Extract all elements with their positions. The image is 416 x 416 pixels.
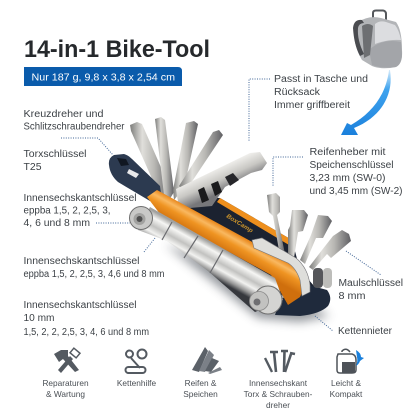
caption: Leicht & Kompakt: Kompakt (330, 389, 363, 399)
tool: tube joints (162, 222, 223, 273)
tool: tire lever (176, 152, 267, 208)
caption: Reifen & Speichen (183, 378, 218, 399)
icon: hammer and roller (54, 348, 80, 373)
caption: Reifen & Speichen: Speichen (183, 389, 218, 399)
caption: Kettenhilfe: Kettenhilfe (117, 378, 156, 388)
tool: logo: BoxCamp (225, 214, 254, 235)
caption: Innensechskant: dreher (266, 400, 290, 410)
label: Maulschlüssel: 8 mm (338, 291, 366, 302)
icon: tire levers fan (192, 347, 222, 374)
tool: orange main arm (147, 190, 306, 305)
caption: Innensechskant: Innensechskant (249, 378, 308, 388)
label: Innensechskant 1 (24, 193, 136, 229)
title: 14-in-1 Bike-Tool (24, 36, 210, 63)
tool: fanned hex bits upper (130, 117, 223, 202)
label: Torx: T25 (24, 162, 42, 173)
label: Innensechskant 2: Innensechskantschlüssel (24, 256, 140, 267)
label: Innensechskant 1: eppba 1,5, 2, 2,5, 3, (24, 206, 110, 216)
badge: weight and dimensions (24, 67, 182, 86)
label: Passt in Tasche: Rücksack (274, 87, 321, 98)
caption: Leicht & Kompakt (330, 378, 363, 399)
label: Torx: Torxschlüssel (24, 149, 86, 160)
label: Innensechskant 2: eppba 1,5, 2, 2,5, 3, 4,6 und 8 mm (24, 269, 164, 280)
tool shadow (165, 244, 330, 322)
label: Reifenheber: Reifenheber mit (310, 147, 386, 158)
caption: Innensechskant: Torx & Schrauben- (244, 389, 313, 399)
leader lines (61, 79, 381, 331)
tool: right hex bits (267, 193, 351, 270)
label: Kettennieter: Kettennieter (338, 326, 393, 337)
tool: orange rear strip (217, 198, 292, 245)
label: Maulschlüssel (338, 278, 403, 302)
icon: backpack (353, 10, 402, 68)
tool: silver tube (138, 207, 283, 312)
arrow: backpack to tool (341, 70, 391, 135)
label: Kreuzdreher: Schlitzschraubendreher (24, 122, 125, 132)
label: Innensechskant 1: 4, 6 und 8 mm (24, 218, 90, 229)
label: Maulschlüssel: Maulschlüssel (338, 278, 403, 289)
icon: small backpack with arrow (337, 349, 364, 373)
label: Reifenheber: Speichenschlüssel (310, 160, 394, 171)
label: Innensechskant 3: 10 mm (24, 313, 54, 324)
label: Innensechskant 1: Innensechskantschlüssel (24, 193, 136, 204)
label: Innensechskant 2 (24, 256, 164, 280)
caption: Reparaturen: & Wartung (46, 389, 85, 399)
multi-tool illustration (109, 117, 351, 316)
badge: weight and dimensions: Nur 187 g, 9,8 x 3,8 x 2,54 cm (32, 72, 175, 84)
tool: small rollers (313, 268, 332, 288)
caption: Leicht & Kompakt: Leicht & (331, 378, 361, 388)
tool: navy back plate (180, 196, 322, 300)
caption: Reifen & Speichen: Reifen & (185, 378, 217, 388)
label: Innensechskant 3 (24, 300, 149, 338)
caption: Reparaturen: Reparaturen (42, 378, 89, 388)
tool: silver arm on orange (252, 238, 310, 296)
icon: chain (126, 350, 146, 373)
label: Kreuzdreher: Kreuzdreher und (24, 109, 104, 120)
label: Innensechskant 3: Innensechskantschlüssel (24, 300, 136, 311)
label: Innensechskant 3: 1,5, 2, 2, 2,5, 3, 4, 6 und 8 mm (24, 327, 149, 338)
label: Torx (24, 149, 86, 173)
label: Reifenheber (310, 147, 402, 197)
tool: navy torx arm (109, 154, 162, 201)
caption: Reparaturen (42, 378, 89, 399)
label: Passt in Tasche (274, 74, 368, 111)
icon: hex and torx keys (265, 351, 295, 372)
label: Passt in Tasche: Passt in Tasche und (274, 74, 368, 85)
tool: lower hub (250, 286, 282, 314)
label: Reifenheber: und 3,45 mm (SW-2) (310, 186, 402, 197)
tool: left hub (130, 206, 152, 230)
label: Passt in Tasche: Immer griffbereit (274, 100, 350, 111)
label: Kreuzdreher (24, 109, 125, 132)
tool: chain rivet disc (275, 284, 330, 316)
caption: Innensechskant (244, 378, 313, 410)
label: Reifenheber: 3,23 mm (SW-0) (310, 173, 386, 184)
